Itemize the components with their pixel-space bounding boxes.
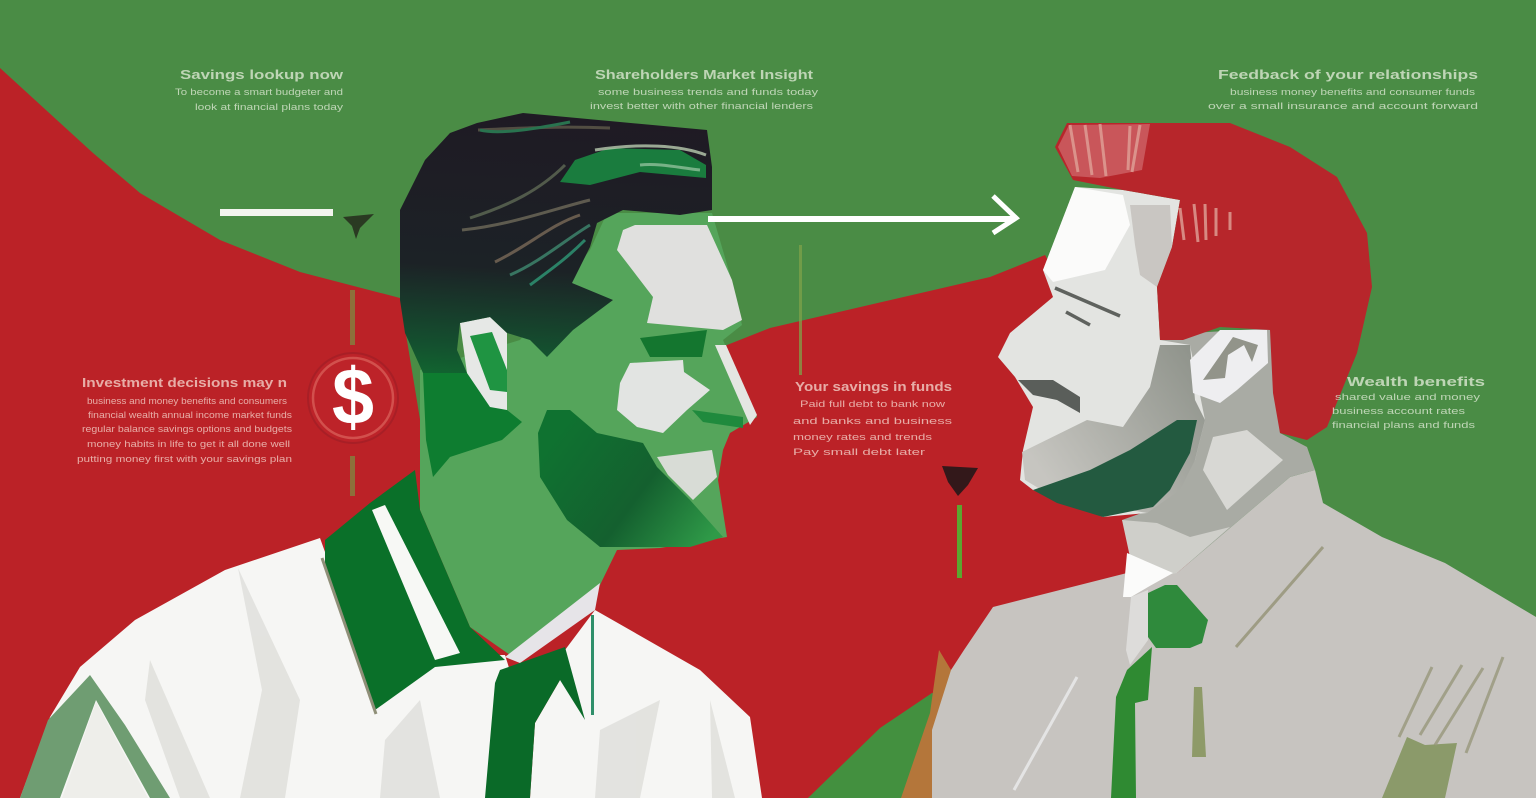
left man shirt left part (20, 538, 530, 798)
text block: top centre (590, 67, 818, 112)
left man hair (400, 113, 712, 373)
man on the left (20, 113, 762, 798)
right man mouth (1018, 380, 1080, 413)
right man grey stubble (1022, 345, 1205, 513)
text block: top centre: some business trends and funds today (598, 87, 818, 98)
left man placket thin teal line (591, 615, 594, 715)
left man inner ear (470, 332, 507, 392)
left man nose edge highlight (715, 345, 757, 425)
icon: dollar badge: $ (332, 352, 374, 441)
text block: top left: look at financial plans today (195, 102, 343, 113)
text block: centre on red: Your savings in funds (795, 379, 952, 394)
right man face (998, 187, 1205, 517)
right man inner ear (1203, 337, 1258, 380)
left man forehead highlight (617, 225, 742, 330)
left man collar edge (322, 558, 376, 714)
right man jacket texture blob (1382, 737, 1457, 798)
text block: top right (1208, 67, 1478, 112)
right man jacket (932, 470, 1536, 798)
text block: top right: Feedback of your relationships (1218, 67, 1478, 82)
text block: right on green: business account rates (1332, 406, 1465, 417)
small dark arrowhead centre (942, 466, 978, 496)
text block: right on green: shared value and money (1335, 392, 1480, 403)
icon: dollar badge (308, 352, 398, 443)
left man beard (538, 410, 723, 547)
left man cheek highlight (617, 360, 710, 433)
text block: centre on red: Pay small debt later (793, 447, 925, 458)
left man hair green band (560, 148, 706, 185)
right man tie tail (1111, 647, 1152, 798)
text block: top left: To become a smart budgeter and (175, 87, 343, 98)
text block: left on red: Investment decisions may n (82, 375, 287, 390)
arrow pointing to the right man (708, 196, 1016, 233)
left man arch inner (62, 702, 148, 798)
right man top curl shading (1058, 124, 1150, 178)
red swoosh background (0, 68, 1190, 798)
right man neck (1122, 328, 1315, 573)
text block: left on red: money habits in life to get it all done well (87, 439, 290, 450)
text block: left on red (77, 375, 292, 465)
text block: right on green: financial plans and funds (1332, 420, 1475, 431)
small dark arrowhead left (343, 214, 374, 239)
right man beard (1033, 420, 1197, 517)
text block: top right: business money benefits and consumer funds (1230, 87, 1475, 98)
left man shirt placket (485, 647, 585, 798)
right man forehead highlight (1043, 187, 1130, 282)
left man dark neck shadow (423, 373, 522, 477)
right man shirt (1123, 553, 1173, 597)
text block: top centre: Shareholders Market Insight (595, 67, 814, 82)
text block: centre on red: Paid full debt to bank now (800, 399, 945, 410)
right man neck highlight (1203, 430, 1283, 510)
right man eye and brow (1055, 288, 1120, 325)
right man lapel line (1236, 547, 1323, 647)
text block: right on green: Wealth benefits (1347, 374, 1485, 389)
text block: left on red: regular balance savings options and budgets (82, 424, 292, 435)
text block: centre on red (793, 379, 952, 458)
tan connector above dollar badge (350, 290, 355, 345)
text block: left on red: financial wealth annual income market funds (88, 410, 292, 421)
right man hair curls (1070, 124, 1230, 242)
tan connector below dollar badge (350, 456, 355, 496)
left man shirt arch (20, 675, 170, 798)
man on the right (932, 123, 1536, 798)
green vertical line lower (957, 505, 962, 578)
text block: left on red: business and money benefits and consumers (87, 396, 287, 407)
text block: centre on red: and banks and business (793, 416, 952, 427)
text block: centre on red: money rates and trends (793, 432, 932, 443)
left man mouth (657, 450, 717, 500)
right man hair (1055, 123, 1372, 440)
text block: left on red: putting money first with your savings plan (77, 454, 292, 465)
right man jacket texture (1399, 657, 1503, 753)
left man collar (325, 470, 505, 710)
left man shirt folds (145, 568, 735, 798)
right man olive vertical stripe (1192, 687, 1206, 757)
text block: top left (175, 67, 344, 113)
short white dash (220, 209, 333, 216)
text block: top centre: invest better with other financial lenders (590, 101, 813, 112)
left man shirt right part (530, 610, 762, 798)
left man eye and brow (640, 330, 707, 357)
text block: top right: over a small insurance and account forward (1208, 101, 1478, 112)
right man ear (1190, 330, 1268, 403)
left man nostril shadow (692, 410, 743, 428)
left man collar stripe (372, 505, 460, 660)
text block: top left: Savings lookup now (180, 67, 344, 82)
left man ear (460, 317, 507, 410)
green vertical connector (799, 245, 802, 375)
right man temple shadow (1130, 205, 1172, 287)
text block: right on green (1332, 374, 1485, 431)
left man hair highlights (462, 122, 706, 285)
orange accent stripe (901, 650, 951, 798)
green corner wedge (808, 693, 934, 798)
left man collar inner white (505, 583, 600, 663)
left man neck and face (420, 213, 757, 655)
right man white lapel line (1014, 677, 1077, 790)
right man shirt under tie (1126, 590, 1148, 665)
right man collar band (1122, 520, 1230, 577)
right man tie knot (1148, 585, 1208, 648)
